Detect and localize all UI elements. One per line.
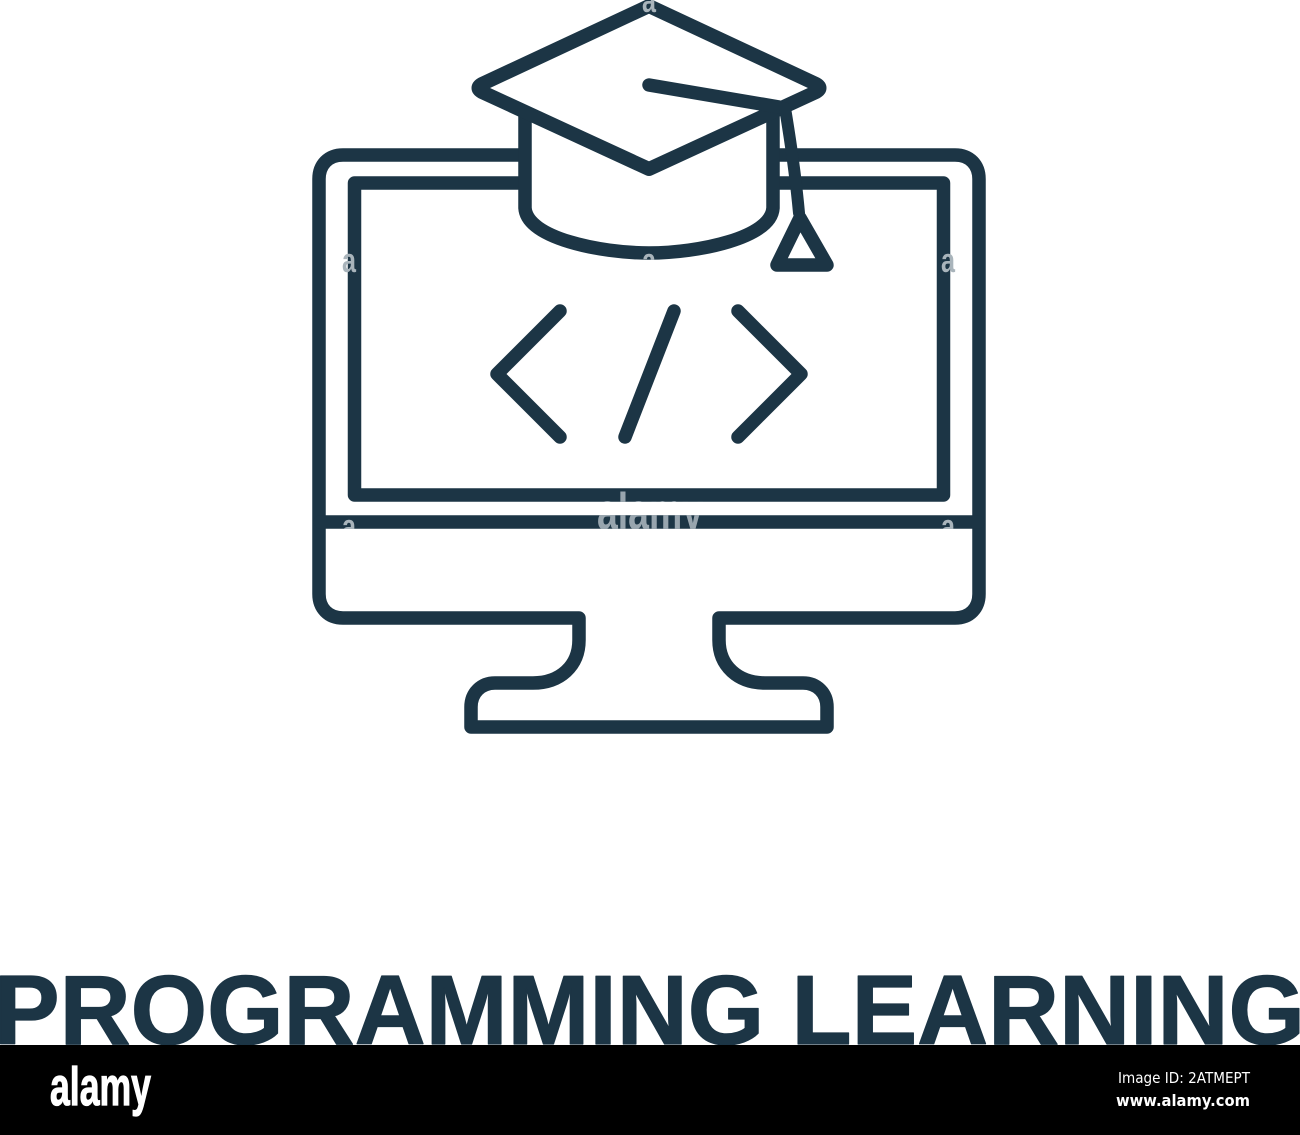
footer logo: alamy	[50, 1057, 151, 1117]
watermark: small marks: a	[342, 508, 357, 546]
watermark: small marks: a	[342, 242, 357, 280]
watermark: small marks	[342, 0, 956, 546]
monitor body	[319, 155, 979, 727]
watermark: small marks: a	[941, 242, 956, 280]
footer bar	[0, 1045, 1300, 1135]
code symbol	[497, 311, 801, 437]
graduation cap base	[525, 60, 773, 253]
watermark: small marks: a	[941, 508, 956, 546]
graduation cap top board	[478, 6, 820, 169]
monitor screen	[354, 183, 944, 495]
monitor divider	[320, 515, 978, 529]
image id: Image ID: 2ATMEPT	[1118, 1069, 1251, 1087]
cap tassel	[777, 218, 827, 265]
cap tassel cord	[785, 108, 799, 213]
watermark: small marks: a	[642, 242, 657, 280]
cap button strap	[649, 85, 779, 107]
website: www.alamy.com	[1116, 1091, 1250, 1110]
watermark: centre logo: alamy	[597, 483, 703, 541]
title: PROGRAMMING LEARNING	[0, 955, 1300, 1065]
watermark: centre logo	[598, 492, 700, 529]
watermark: centre logo: alamy	[597, 483, 703, 541]
icon: computer monitor with graduation cap and code symbol	[319, 6, 979, 727]
